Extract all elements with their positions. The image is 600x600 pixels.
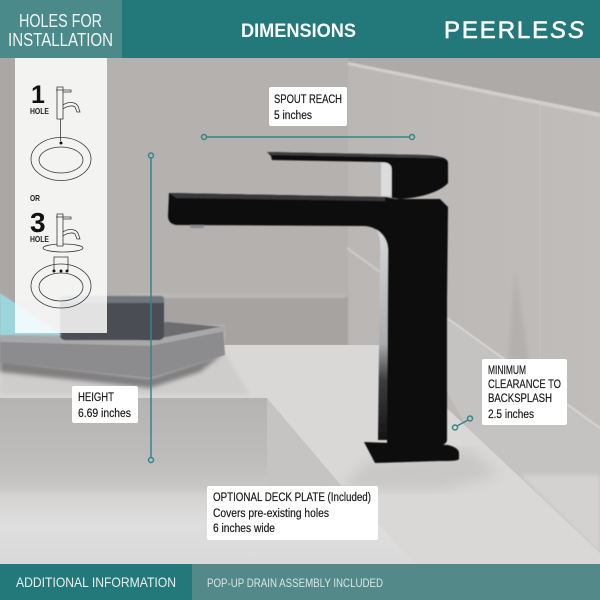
handle lever	[267, 152, 448, 199]
faucet	[168, 152, 459, 463]
icon: one hole faucet and sink	[30, 81, 91, 180]
handle chrome	[381, 163, 391, 196]
heading: holes for installation: INSTALLATION	[8, 30, 113, 50]
callout: spout reach: 5 inches	[274, 110, 312, 122]
callout: height: 6.69 inches	[78, 408, 131, 420]
sink front face	[0, 398, 267, 490]
callout: minimum clearance: 2.5 inches	[488, 409, 534, 421]
deck plate	[364, 442, 459, 463]
callout: optional deck plate: 6 inches wide	[213, 523, 275, 535]
spout aerator	[190, 225, 204, 228]
callout: optional deck plate	[207, 486, 378, 540]
footer text: POP-UP DRAIN ASSEMBLY INCLUDED	[207, 578, 383, 590]
logo: peerless: PEERLESS	[444, 17, 584, 44]
icon: three hole faucet and sink	[30, 193, 91, 308]
soap dish tray	[0, 328, 225, 378]
faucet side face	[372, 226, 392, 440]
faucet body and spout	[168, 193, 448, 449]
callout: minimum clearance: CLEARANCE TO	[488, 379, 561, 391]
heading: holes for installation: HOLES FOR	[19, 11, 102, 31]
panel: holes for installation	[15, 58, 107, 333]
dimension line: height	[148, 153, 154, 462]
icon: one hole faucet and sink: 1	[31, 81, 45, 109]
callout: minimum clearance	[482, 359, 567, 425]
icon: three hole faucet and sink: OR	[30, 193, 40, 203]
dimension line: spout reach	[202, 134, 414, 140]
icon: three hole faucet and sink: HOLE	[30, 234, 49, 244]
callout: spout reach	[269, 87, 347, 126]
callout: spout reach: SPOUT REACH	[274, 94, 342, 106]
header bar	[0, 0, 600, 58]
counter top	[0, 345, 600, 568]
callout: minimum clearance: BACKSPLASH	[488, 393, 552, 405]
callout: optional deck plate: Covers pre-existing holes	[213, 508, 329, 520]
icon: one hole faucet and sink: HOLE	[30, 106, 49, 116]
callout: optional deck plate: OPTIONAL DECK PLATE (Included)	[213, 492, 371, 504]
icon: three hole faucet and sink: 3	[30, 207, 46, 238]
callout: height: HEIGHT	[78, 392, 114, 404]
dimension line: clearance	[452, 416, 472, 430]
footer label: ADDITIONAL INFORMATION	[16, 574, 176, 590]
callout: height	[72, 386, 138, 423]
footer bar	[0, 564, 600, 600]
title: dimensions: DIMENSIONS	[241, 21, 356, 42]
callout: minimum clearance: MINIMUM	[488, 365, 526, 377]
